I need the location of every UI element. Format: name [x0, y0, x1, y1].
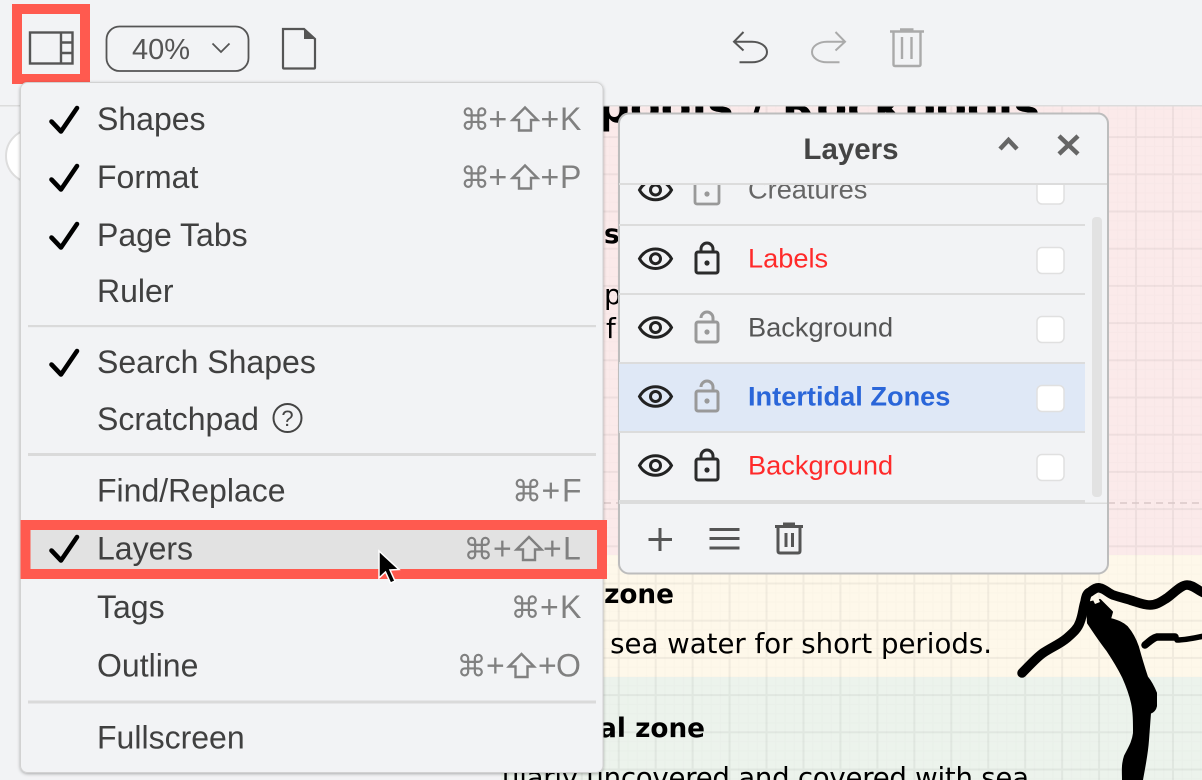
- item: Layers highlighted with red outline: +: [493, 531, 512, 567]
- item: Layers highlighted with red outline: Layers: [97, 531, 193, 567]
- item: Format: Format: [97, 159, 198, 195]
- layer row: Intertidal Zones selected: Intertidal Zones: [748, 380, 950, 412]
- item: Shapes: +: [488, 101, 507, 137]
- item: Outline: ⌘: [456, 650, 486, 685]
- toolbar: [0, 0, 1202, 105]
- mouse cursor: [379, 551, 399, 583]
- layer list: [619, 174, 1085, 504]
- item: Tags: +: [540, 589, 559, 625]
- scrollbar: [1092, 217, 1102, 497]
- item: Outline: [97, 648, 581, 685]
- icon: collapse: [1000, 140, 1017, 149]
- layer row: Labels: [640, 242, 1064, 274]
- item: Find/Replace: ⌘: [512, 474, 542, 510]
- item: Tags: K: [560, 589, 581, 625]
- layer row: Creatures: Creatures: [748, 174, 867, 204]
- item: Layers highlighted with red outline: [26, 525, 602, 574]
- panel frame: [619, 114, 1108, 574]
- layer row: Background locked: [640, 450, 1064, 480]
- item: Find/Replace: [97, 472, 582, 510]
- item: Find/Replace: F: [562, 472, 582, 508]
- high tide zone band: [501, 555, 1202, 677]
- icon: undo: [734, 32, 767, 62]
- canvas: intertidal diagram: [489, 80, 1202, 780]
- item: Outline: O: [556, 648, 581, 684]
- layers panel: [619, 114, 1108, 574]
- item: Format: [52, 159, 581, 196]
- zoom dropdown: 40%: [132, 34, 190, 66]
- icon: close: [1059, 136, 1078, 154]
- item: Layers highlighted with red outline: ⌘: [464, 533, 494, 568]
- item: Search Shapes: Search Shapes: [97, 344, 316, 380]
- item: Layers highlighted with red outline: +: [543, 531, 562, 567]
- item: Layers highlighted with red outline: L: [563, 531, 581, 567]
- icon: page: [283, 28, 316, 68]
- icon: panel view with red highlight: [17, 9, 85, 79]
- layer row: Background: Background: [748, 312, 893, 342]
- zoom dropdown: [106, 26, 248, 71]
- panel title: Layers: [803, 133, 899, 166]
- icon: redo: [812, 32, 845, 62]
- icon: help: ?: [281, 406, 294, 431]
- item: Page Tabs: Page Tabs: [97, 217, 248, 253]
- item: Shapes: ⌘: [460, 103, 490, 138]
- icon: layer menu: [710, 530, 740, 548]
- item: Shapes: +: [540, 101, 559, 137]
- label sliver: heading: s: [604, 220, 620, 250]
- layer row: Background: [640, 312, 1064, 342]
- item: Shapes: [52, 101, 581, 138]
- sidebar search circle: [6, 129, 60, 183]
- item: Format: +: [488, 159, 507, 195]
- high tide zone heading: zone: [604, 580, 674, 610]
- toolbar bottom border: [0, 105, 1202, 106]
- layer row: Labels: Labels: [748, 242, 828, 274]
- item: Find/Replace: Find/Replace: [97, 472, 286, 508]
- item: Fullscreen: Fullscreen: [97, 720, 245, 756]
- diagram title: Tidepools / Rockpools: [489, 80, 1040, 133]
- item: Format: +: [540, 159, 559, 195]
- item: Tags: [97, 589, 581, 626]
- layer row: Intertidal Zones selected: [619, 362, 1085, 433]
- item: Find/Replace: +: [542, 472, 560, 508]
- item: Tags: ⌘: [510, 591, 540, 626]
- layer row: Creatures: [638, 185, 1065, 206]
- item: Shapes: Shapes: [97, 101, 206, 137]
- layer row: Background locked: Background: [748, 450, 893, 480]
- supratidal zone band: [501, 106, 1202, 555]
- icon: add layer: [648, 528, 672, 551]
- label sliver: body lines: f: [606, 312, 617, 345]
- item: Outline: +: [538, 648, 557, 684]
- item: Scratchpad: Scratchpad: [97, 401, 259, 437]
- icon: delete layer: [775, 524, 803, 553]
- label sliver: body lines: p: [604, 278, 622, 311]
- icon: delete: [890, 30, 924, 66]
- item: Outline: Outline: [97, 648, 198, 684]
- item: Ruler: Ruler: [97, 273, 174, 309]
- menu panel: [20, 82, 603, 772]
- item: Format: ⌘: [460, 161, 490, 196]
- item: Outline: +: [486, 648, 505, 684]
- item: Tags: Tags: [97, 589, 165, 625]
- high tide zone description: sea water for short periods.: [610, 627, 992, 660]
- icon: help: [274, 404, 302, 432]
- creature sketch: [1022, 585, 1202, 780]
- mid tide zone heading: al zone: [599, 714, 705, 744]
- mid tide zone band: [501, 677, 1202, 780]
- toolbar strip: [0, 0, 1202, 105]
- view menu: [20, 82, 603, 772]
- item: Format: P: [560, 159, 581, 195]
- item: Shapes: K: [560, 101, 581, 137]
